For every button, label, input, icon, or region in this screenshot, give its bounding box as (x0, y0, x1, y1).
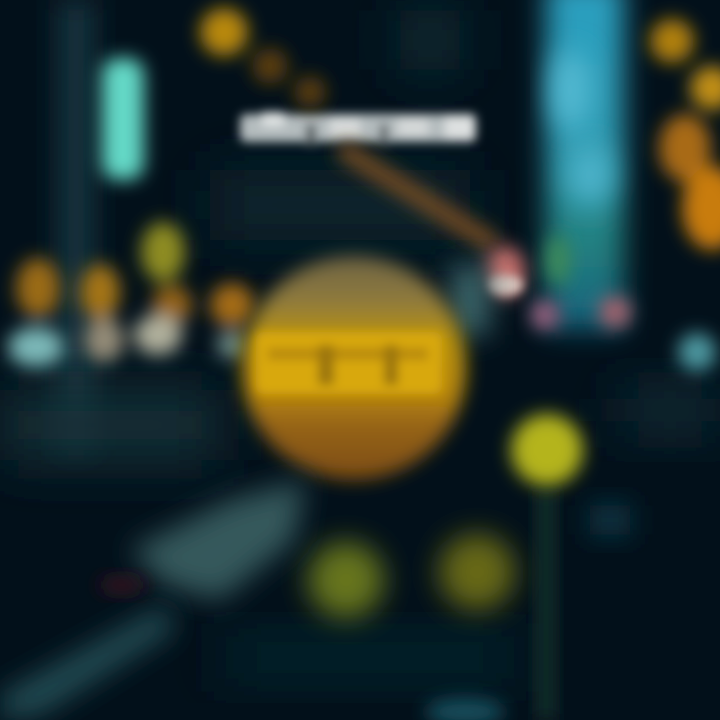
coin label (256, 332, 442, 394)
small yellow-green coin middle (439, 534, 515, 610)
left lights (8, 222, 254, 367)
right coloured dots (450, 265, 716, 371)
central coin (242, 256, 466, 480)
grey teal shape (130, 480, 305, 600)
small yellow-green coin left (308, 542, 384, 618)
blue light column (546, 0, 624, 330)
teal light bar (102, 58, 144, 180)
title block (240, 112, 476, 146)
top yellow coins (200, 8, 326, 108)
right orange coins (650, 19, 720, 250)
red accent (98, 577, 146, 593)
bottom left diagonal (0, 605, 175, 720)
orange diagonal arrow (340, 148, 525, 298)
bottom teal glow (425, 698, 505, 720)
small yellow-green coin right (511, 414, 583, 486)
